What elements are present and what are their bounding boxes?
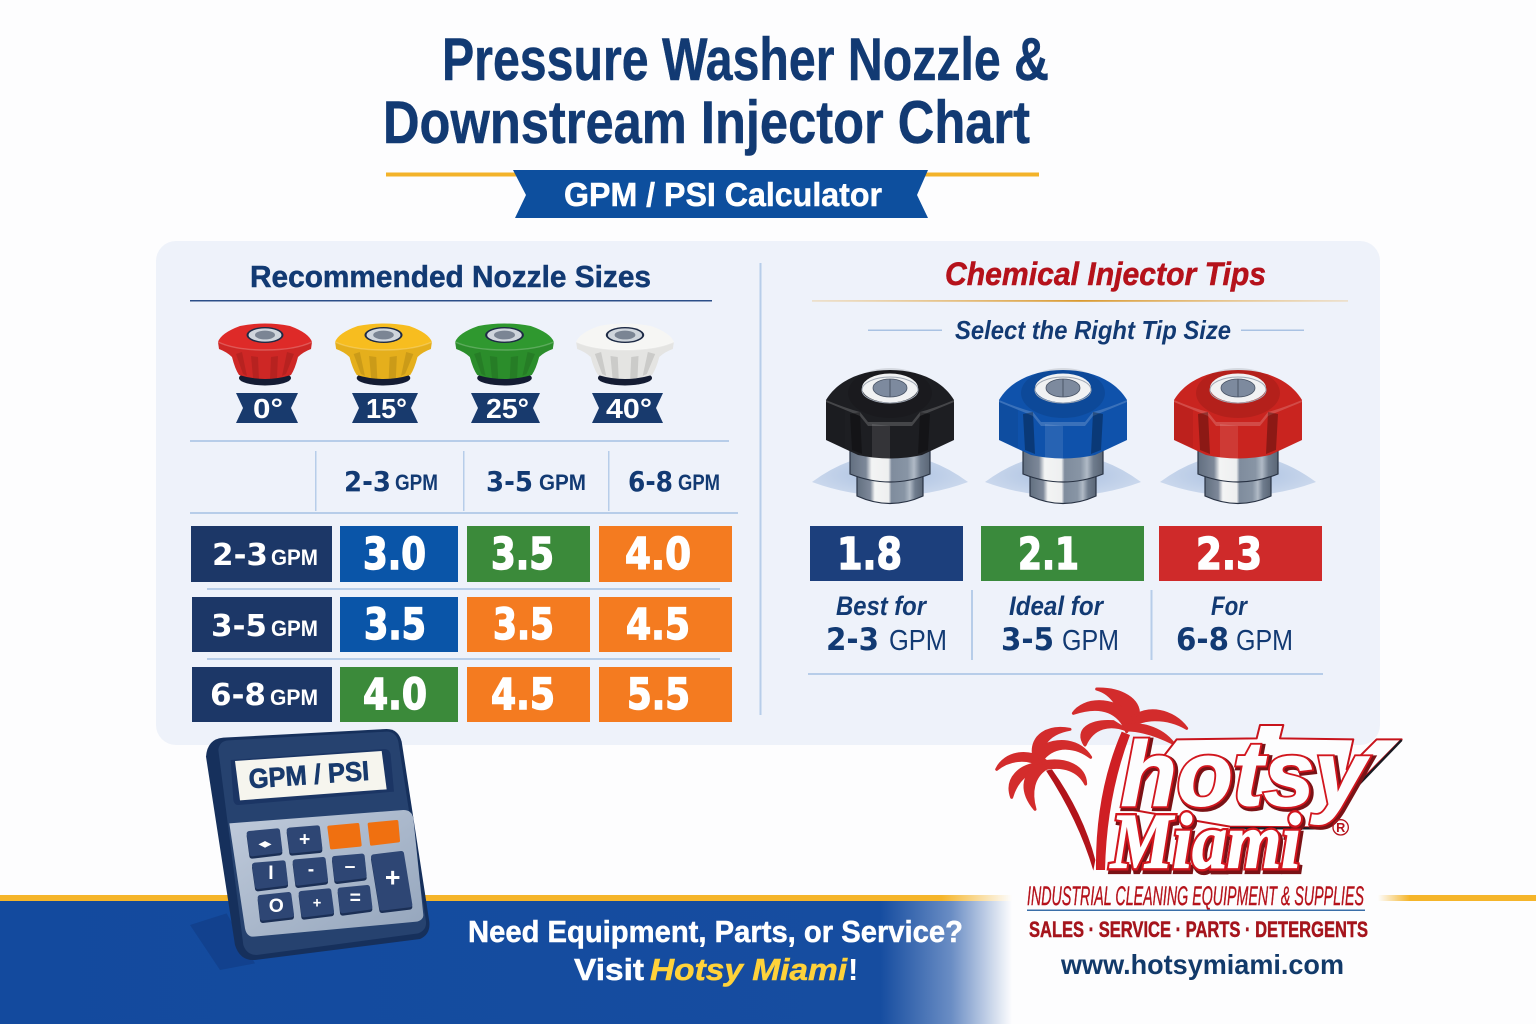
caption: best for 2-3 GPM: Best for xyxy=(836,591,927,621)
subtitle ribbon xyxy=(386,170,1039,218)
table row: 3-5 GPM: 3.5 xyxy=(493,600,554,650)
tip value: 2.3: 2.3 xyxy=(1196,529,1262,580)
table column headers: 6-8 xyxy=(628,465,673,498)
table row: 2-3 GPM: 3.5 xyxy=(491,529,554,580)
tip value: 2.3 xyxy=(1159,526,1322,581)
label: 25 degrees xyxy=(471,393,540,424)
nozzle: 15 degree yellow xyxy=(335,324,432,386)
caption: best for 2-3 GPM: 2-3 xyxy=(826,622,879,658)
nozzle: 25 degree green xyxy=(455,324,554,386)
services line: SALES · SERVICE · PARTS · DETERGENTS xyxy=(1029,917,1368,942)
logo palm trees xyxy=(997,689,1187,871)
website: www.hotsymiami.com xyxy=(1060,949,1344,980)
panel: chart card xyxy=(156,241,1380,745)
table column headers: GPM xyxy=(395,470,438,495)
heading: chemical injector tips: Chemical Injector Tips xyxy=(945,256,1266,292)
table column headers: GPM xyxy=(678,470,720,495)
label: 0 degrees xyxy=(236,393,298,424)
table row: 6-8 GPM: 4.0 xyxy=(363,670,427,720)
subheading: select the right tip size: Select the Right Tip Size xyxy=(955,315,1231,345)
footer call to action: ! xyxy=(848,952,858,987)
footer call to action xyxy=(468,914,963,987)
injector tip: blue xyxy=(985,368,1141,504)
footer call to action: Need Equipment, Parts, or Service? xyxy=(468,914,963,949)
icon: calculator: + xyxy=(385,863,400,893)
table row: 3-5 GPM xyxy=(192,597,732,652)
logo script Miami: Miami xyxy=(1111,801,1303,888)
nozzle: 40 degree white xyxy=(576,324,674,386)
table row: 3-5 GPM: 3.5 xyxy=(364,600,426,650)
table row: 2-3 GPM: GPM xyxy=(271,545,318,570)
injector tip: black xyxy=(812,368,968,504)
label: 25 degrees: 25° xyxy=(486,393,529,424)
caption: for 6-8 GPM xyxy=(1176,591,1293,658)
table column headers: GPM xyxy=(539,470,586,495)
label: 40 degrees: 40° xyxy=(606,393,652,424)
table column headers: 2-3 xyxy=(344,465,391,498)
label: 40 degrees xyxy=(592,393,663,424)
caption: for 6-8 GPM: GPM xyxy=(1236,625,1293,657)
logo wordmark hotsy: hotsy xyxy=(1123,725,1372,827)
table row: 6-8 GPM: 6-8 xyxy=(210,678,266,713)
label: 15 degrees xyxy=(352,393,418,424)
nozzle: 0 degree red xyxy=(218,324,312,386)
table row: 3-5 GPM: 3-5 xyxy=(211,609,267,644)
panel: chemical injector tips xyxy=(808,256,1348,675)
table row: 2-3 GPM: 2-3 xyxy=(212,538,268,573)
table row: 2-3 GPM: 3.0 xyxy=(363,529,426,580)
heading: recommended nozzle sizes: Recommended Nozzle Sizes xyxy=(250,259,651,294)
caption: ideal for 3-5 GPM: Ideal for xyxy=(1009,591,1104,621)
icon: calculator: I xyxy=(268,863,274,884)
icon: calculator: – xyxy=(345,857,356,878)
caption: for 6-8 GPM: For xyxy=(1211,591,1248,621)
title xyxy=(383,26,1049,156)
logo registered mark xyxy=(1333,820,1348,835)
caption: best for 2-3 GPM: GPM xyxy=(889,625,947,657)
footer call to action: Visit xyxy=(574,952,644,987)
tip value: 2.1: 2.1 xyxy=(1018,529,1079,580)
caption: ideal for 3-5 GPM xyxy=(1001,591,1119,658)
caption: ideal for 3-5 GPM: 3-5 xyxy=(1001,622,1054,658)
table row: 6-8 GPM: GPM xyxy=(270,685,318,710)
table column headers: 3-5 xyxy=(486,465,533,498)
logo script Miami: Miami xyxy=(1109,797,1301,884)
logo registered mark: R xyxy=(1336,821,1345,835)
title: Downstream Injector Chart xyxy=(383,89,1030,156)
footer call to action: Hotsy Miami xyxy=(650,952,848,987)
table row: 6-8 GPM: 4.5 xyxy=(491,670,555,720)
table row: 2-3 GPM xyxy=(191,526,732,582)
icon: calculator: + xyxy=(299,830,310,851)
caption: best for 2-3 GPM xyxy=(826,591,947,658)
label: 15 degrees: 15° xyxy=(366,393,407,424)
label: 0 degrees: 0° xyxy=(253,393,283,424)
table row: 6-8 GPM xyxy=(192,667,732,722)
icon: calculator: = xyxy=(350,888,361,909)
table row: 3-5 GPM: GPM xyxy=(271,616,318,641)
title: Pressure Washer Nozzle & xyxy=(442,26,1049,93)
icon: calculator: O xyxy=(269,896,284,917)
table row: 3-5 GPM: 4.5 xyxy=(626,600,690,650)
icon: calculator: ◂▸ xyxy=(258,836,272,850)
icon: calculator: GPM / PSI xyxy=(248,755,370,794)
tip value: 1.8 xyxy=(810,526,963,581)
logo script Miami: Miami xyxy=(1109,797,1301,884)
logo: Hotsy Miami xyxy=(997,689,1402,888)
subtitle ribbon: GPM / PSI Calculator xyxy=(564,176,882,213)
tip value: 2.1 xyxy=(981,526,1144,581)
icon: calculator: - xyxy=(308,860,314,881)
table column headers xyxy=(344,465,720,498)
logo wordmark hotsy: hotsy xyxy=(1121,723,1370,825)
caption: for 6-8 GPM: 6-8 xyxy=(1176,622,1229,658)
footer band xyxy=(0,895,1536,1024)
panel: recommended nozzle sizes xyxy=(190,259,738,722)
injector tip: red xyxy=(1160,368,1316,504)
icon: calculator: + xyxy=(313,896,321,912)
caption: ideal for 3-5 GPM: GPM xyxy=(1062,625,1119,657)
icon: calculator xyxy=(190,729,429,970)
logo wordmark hotsy: hotsy xyxy=(1121,723,1370,825)
table row: 2-3 GPM: 4.0 xyxy=(625,529,691,580)
table row: 6-8 GPM: 5.5 xyxy=(627,670,690,720)
tip value: 1.8: 1.8 xyxy=(837,529,902,580)
